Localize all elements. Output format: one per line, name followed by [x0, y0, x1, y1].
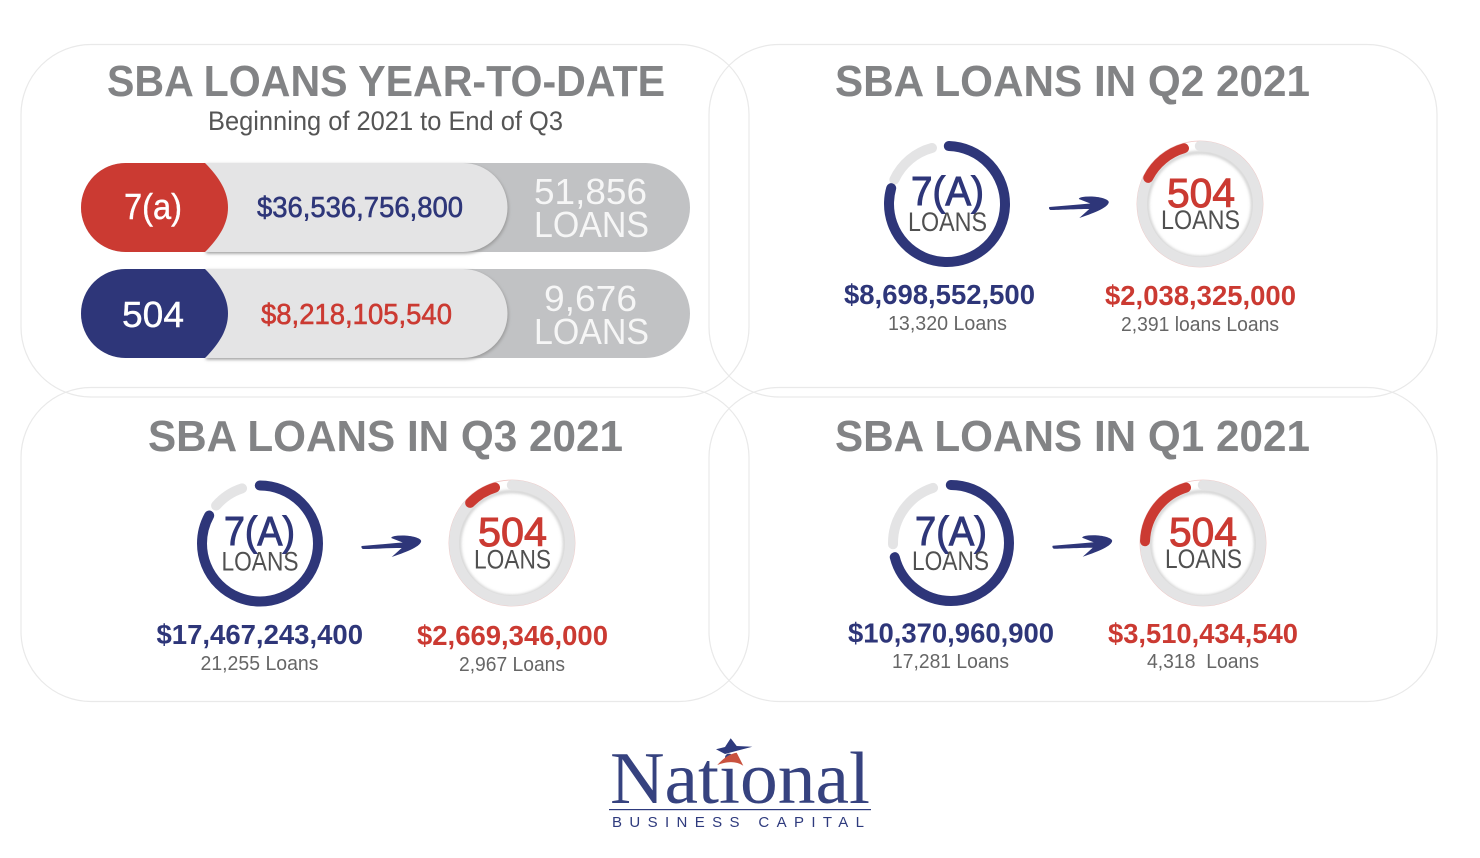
ring: 7(A): 7(A) [224, 508, 295, 554]
panel: Q1 2021 [709, 388, 1437, 702]
stat: 504 amount: $2,038,325,000 [1105, 280, 1296, 311]
panel outline [21, 388, 749, 702]
arrow [1049, 196, 1109, 218]
ring: 7(A): LOANS [912, 546, 989, 576]
stat: 7(A) amount: $17,467,243,400 [156, 619, 363, 650]
stat: 7(A) amount [844, 279, 1035, 335]
ring: 504 [1122, 126, 1278, 282]
arrow [1052, 535, 1112, 557]
ring: 504: 504 [1167, 170, 1235, 216]
bar: 7(a): LOANS [534, 204, 649, 245]
stat: 504 amount [1105, 280, 1296, 336]
ring: 7(A): LOANS [908, 207, 987, 237]
ring: 504: LOANS [1165, 544, 1242, 574]
bar: 504 [81, 269, 690, 360]
bar: 7(a): 7(a) [124, 186, 182, 227]
ring: 504: 504 [1169, 509, 1237, 555]
ring: 7(A) [870, 127, 1024, 281]
panel: year-to-date [21, 44, 749, 397]
bar: 7(a): $36,536,756,800 [257, 192, 463, 224]
stat: 504 amount: 4,318 Loans [1147, 651, 1259, 673]
title: SBA LOANS YEAR-TO-DATE [107, 57, 665, 106]
stat: 504 amount: $3,510,434,540 [1108, 618, 1298, 649]
title: SBA LOANS IN Q1 2021 [835, 412, 1310, 461]
title: SBA LOANS IN Q2 2021 [835, 57, 1310, 106]
stat: 7(A) amount: $8,698,552,500 [844, 279, 1035, 310]
ring: 504: 504 [478, 509, 547, 555]
logo wordmark: National [610, 738, 870, 820]
ring: 7(A): LOANS [222, 546, 298, 576]
panel: Q3 2021 [21, 388, 749, 702]
stat: 7(A) amount: $10,370,960,900 [848, 618, 1054, 648]
ring: 504: LOANS [1161, 205, 1240, 235]
bar: 7(a) [81, 163, 690, 254]
stat: 504 amount: 2,967 Loans [459, 654, 565, 676]
stat: 504 amount: $2,669,346,000 [417, 620, 608, 651]
ring: 504: LOANS [474, 544, 551, 574]
stat: 7(A) amount [156, 619, 363, 675]
panel outline [21, 44, 749, 397]
bar: 7(a): 51,856 [534, 171, 647, 212]
ring: 504 [430, 461, 594, 625]
stat: 504 amount [1108, 618, 1298, 673]
logo: National Business Capital [609, 738, 871, 831]
bar: 504: $8,218,105,540 [261, 299, 452, 331]
icon: red swoosh [717, 753, 743, 766]
subtitle: Beginning of 2021 to End of Q3 [208, 106, 563, 136]
bar: 504: 9,676 [544, 278, 637, 319]
bar: 504: 504 [122, 294, 184, 335]
ring: 7(A): 7(A) [915, 508, 987, 554]
bar: 504: LOANS [534, 311, 649, 352]
stat: 504 amount [417, 620, 608, 676]
title: SBA LOANS IN Q3 2021 [148, 412, 623, 461]
ring: 504 [1140, 480, 1266, 606]
panel outline [709, 44, 1437, 397]
icon: star [716, 738, 752, 754]
stat: 7(A) amount: 13,320 Loans [888, 313, 1007, 335]
stat: 7(A) amount [848, 618, 1054, 673]
stat: 7(A) amount: 21,255 Loans [200, 653, 318, 675]
ring: 7(A) [178, 462, 342, 625]
logo rule [609, 809, 871, 810]
stat: 7(A) amount: 17,281 Loans [892, 651, 1009, 673]
ring: 7(A) [892, 484, 1010, 602]
arrow [361, 536, 421, 557]
panel outline [709, 388, 1437, 702]
panel: Q2 2021 [709, 44, 1437, 397]
stat: 504 amount: 2,391 loans Loans [1121, 314, 1279, 336]
ring: 7(A): 7(A) [911, 168, 984, 214]
logo tagline: BUSINESS CAPITAL [612, 814, 864, 831]
